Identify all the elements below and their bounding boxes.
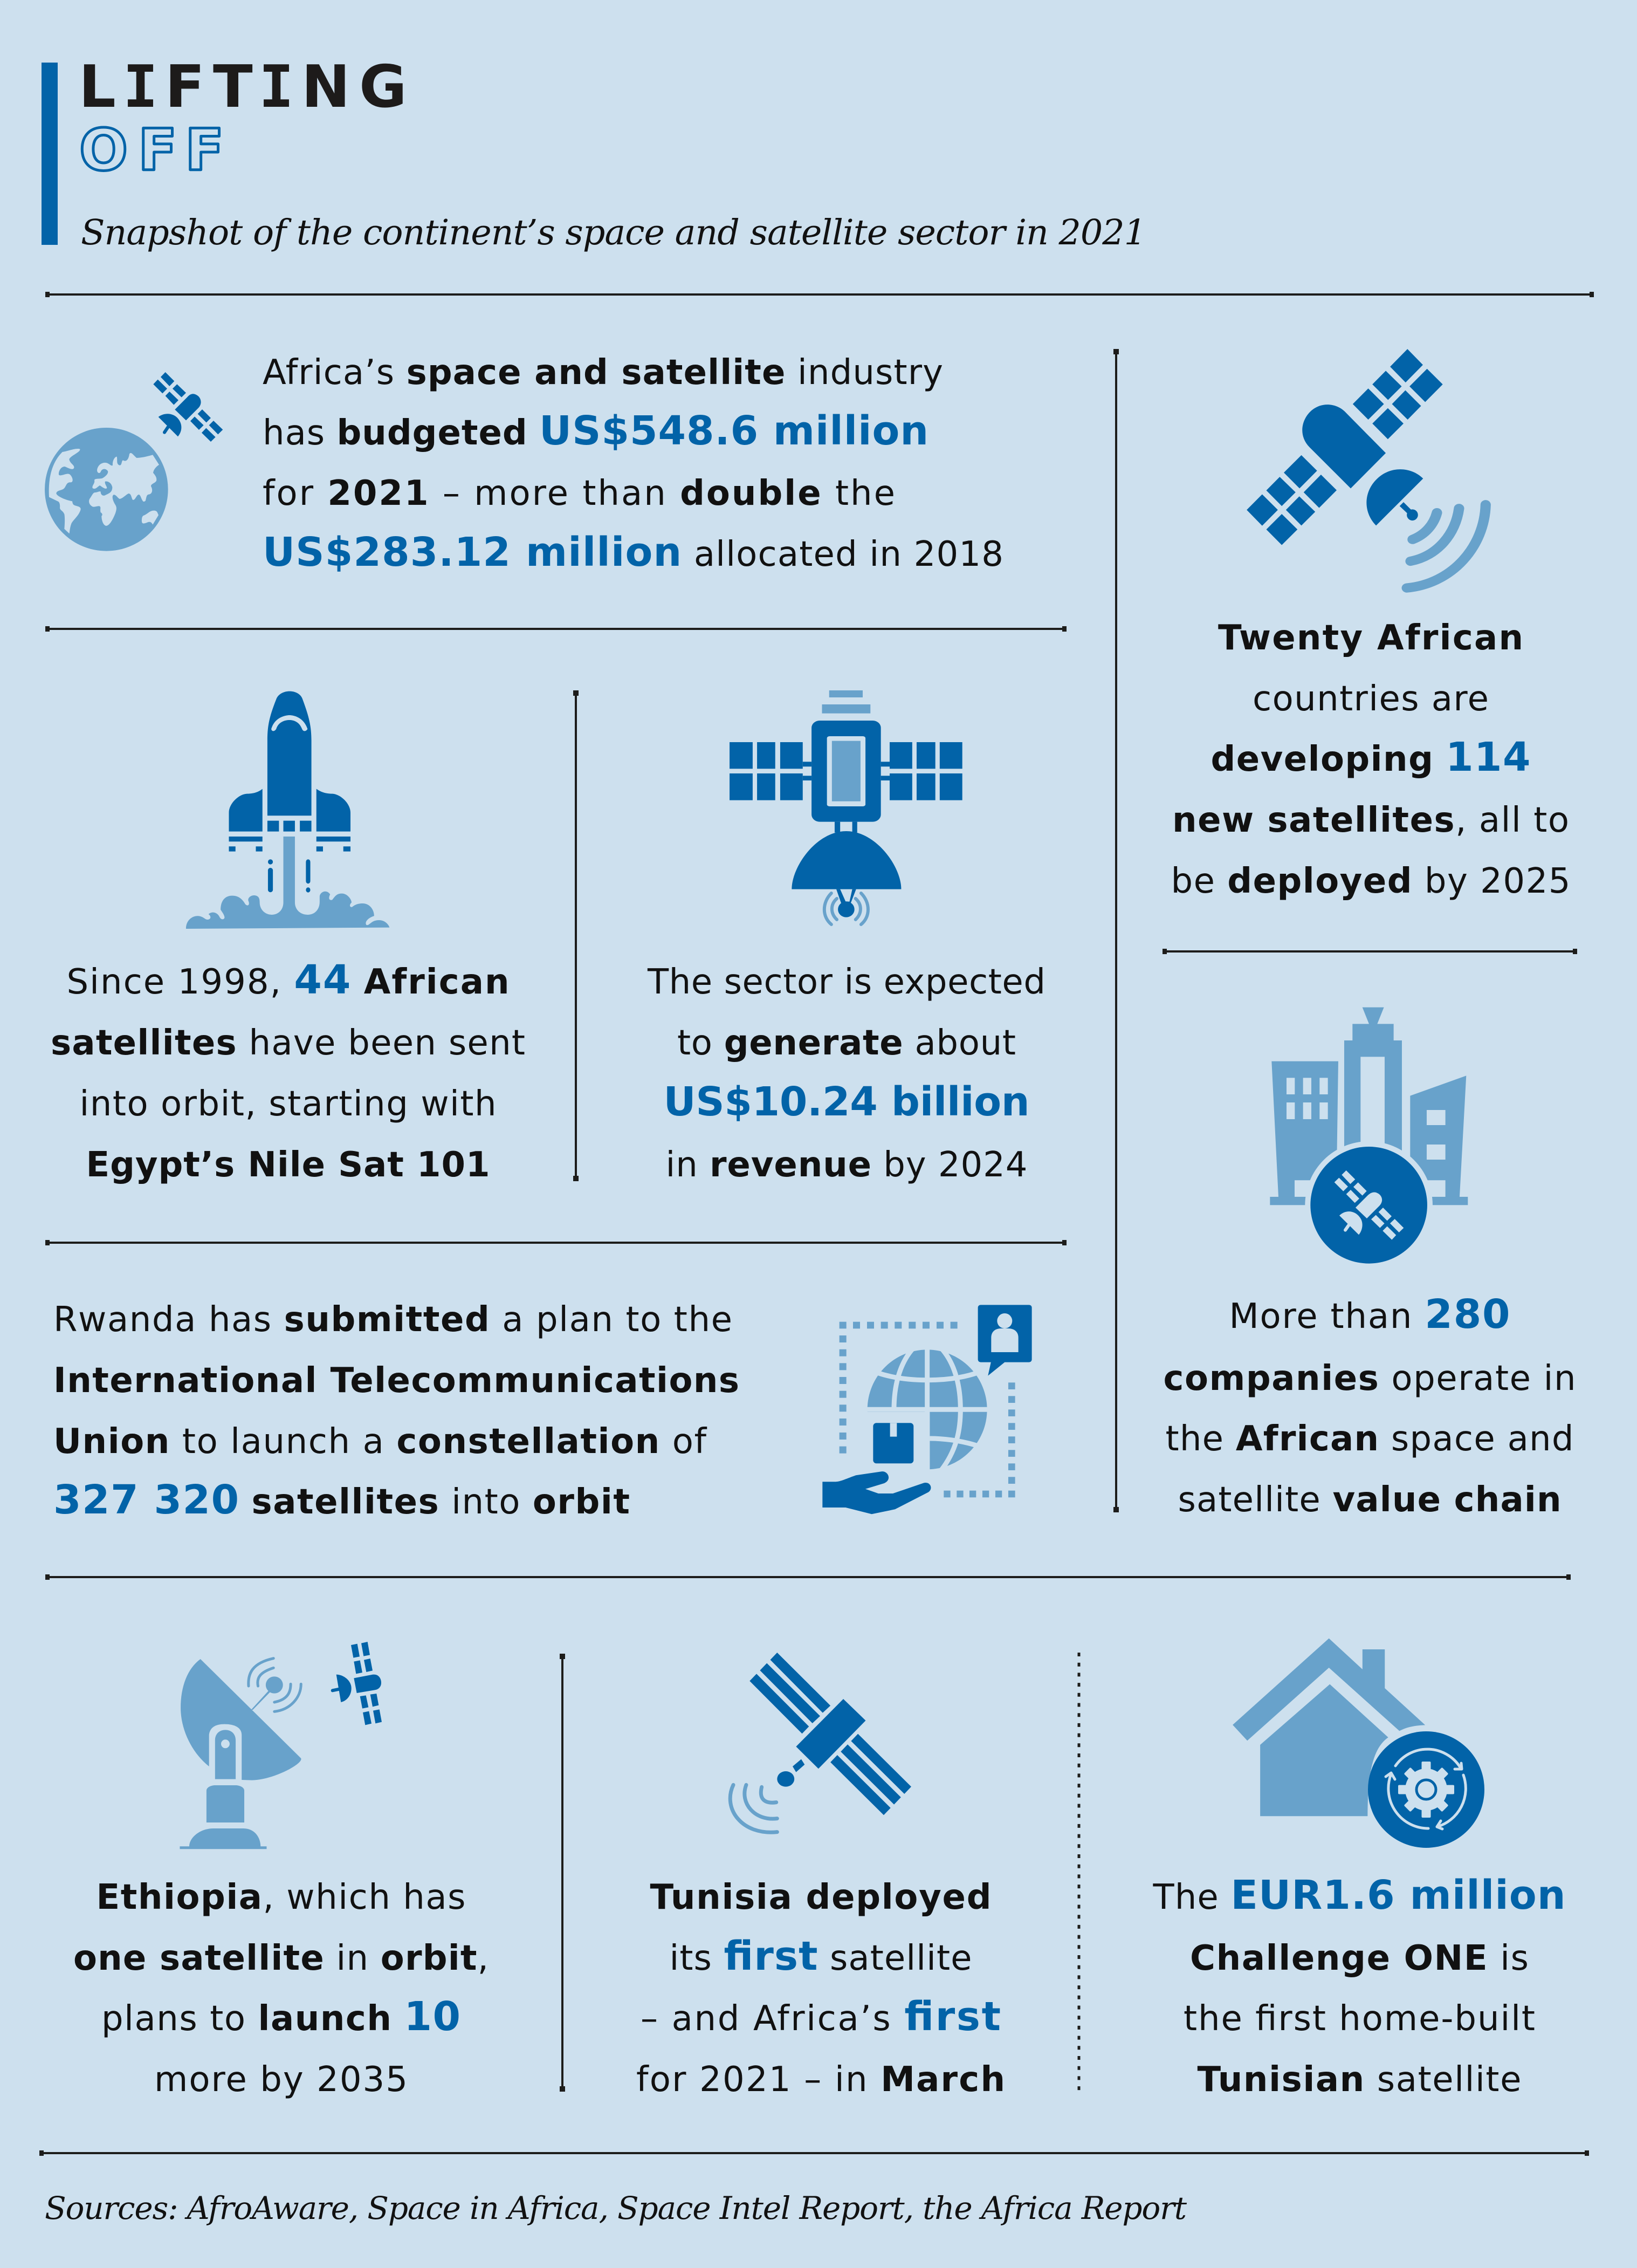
text: Rwanda: Rwanda has submitted a plan to the (53, 1300, 732, 1340)
text: Challenge ONE: Challenge ONE is (1190, 1938, 1529, 1978)
sources: Sources: AfroAware, Space in Africa, Space Intel Report, the Africa Report (45, 2190, 1187, 2226)
text: revenue (647, 962, 1046, 1185)
title block (42, 53, 1146, 253)
title: LIFTING: F (165, 53, 205, 121)
icon: house with gear badge (1233, 1639, 1484, 1848)
icon: rocket launch (186, 691, 389, 929)
panel: twenty countries (1171, 349, 1570, 901)
text: launched satellites: Egypt’s Nile Sat 101 (86, 1145, 490, 1185)
text: revenue: US$10.24 billion (663, 1079, 1030, 1125)
text: Rwanda: Union to launch a constellation of (53, 1422, 707, 1462)
panel: 280 companies (1164, 1008, 1576, 1520)
text: 280 companies: companies operate in (1164, 1359, 1576, 1399)
text: Tunisia (636, 1878, 1005, 2100)
panel: budget (45, 353, 1003, 575)
text: 280 companies (1164, 1291, 1576, 1520)
accent bar (42, 63, 58, 245)
title: OFF: O (79, 117, 128, 183)
text: Challenge ONE: Tunisian satellite (1197, 2060, 1522, 2100)
text: launched satellites: into orbit, starting with (80, 1084, 496, 1124)
text: Challenge ONE: The EUR1.6 million (1153, 1872, 1566, 1918)
text: launched satellites: Since 1998, 44 African (67, 957, 509, 1003)
subtitle: Snapshot of the continent’s space and satellite sector in 2021 (81, 213, 1146, 253)
icon: city with satellite badge (1270, 1008, 1468, 1269)
text: Challenge ONE: the first home-built (1184, 1999, 1535, 2039)
text: Tunisia: Tunisia deployed (650, 1878, 991, 1917)
text: twenty countries: new satellites, all to (1172, 800, 1569, 840)
icon: globe, parcel and hand (822, 1305, 1032, 1514)
text: Rwanda: International Telecommunications (53, 1361, 739, 1401)
icon: satellite in orbit (730, 1653, 911, 1832)
title: LIFTING: T (213, 53, 253, 121)
icon: globe with satellite (45, 372, 223, 551)
text: twenty countries (1171, 618, 1570, 901)
panel: Ethiopia (73, 1642, 489, 2100)
icon: ground dish and satellite (180, 1642, 382, 1849)
text: Ethiopia: Ethiopia, which has (96, 1878, 466, 1917)
text: twenty countries: Twenty African (1218, 618, 1523, 658)
text: 280 companies: More than 280 (1229, 1291, 1510, 1338)
text: 280 companies: satellite value chain (1178, 1480, 1562, 1520)
text: launched satellites: satellites have been sent (51, 1023, 525, 1063)
panel: Challenge ONE (1153, 1639, 1566, 2100)
title: LIFTING: L (79, 53, 116, 121)
text: Challenge ONE (1153, 1872, 1566, 2100)
text: budget (263, 353, 1003, 575)
text: Rwanda (53, 1300, 739, 1523)
text: revenue: to generate about (677, 1023, 1016, 1063)
icon: satellite with dish (730, 690, 962, 924)
text: twenty countries: developing 114 (1211, 734, 1530, 780)
text: Tunisia: for 2021 – in March (636, 2060, 1005, 2100)
panel: launched satellites (51, 691, 525, 1185)
text: 280 companies: the African space and (1166, 1419, 1573, 1459)
title: LIFTING: G (359, 53, 407, 121)
text: budget: US$283.12 million allocated in 2018 (263, 529, 1003, 575)
text: Ethiopia: one satellite in orbit, (73, 1938, 489, 1978)
text: Ethiopia: plans to launch 10 (101, 1993, 460, 2040)
title: OFF: F (138, 117, 177, 183)
title: LIFTING: I (123, 53, 158, 121)
panel: revenue (647, 690, 1046, 1185)
text: Tunisia: – and Africa’s first (641, 1993, 1001, 2040)
text: revenue: The sector is expected (647, 962, 1046, 1002)
panel: Tunisia (636, 1653, 1005, 2100)
text: Ethiopia (73, 1878, 489, 2100)
title: OFF: F (185, 117, 224, 183)
text: launched satellites (51, 957, 525, 1185)
panel: Rwanda (53, 1300, 1032, 1523)
text: budget: Africa’s space and satellite industry (263, 353, 943, 393)
text: Rwanda: 327 320 satellites into orbit (53, 1477, 630, 1523)
icon: satellite with signal (1247, 349, 1485, 588)
text: Tunisia: its first satellite (670, 1933, 972, 1979)
title: LIFTING: I (259, 53, 294, 121)
title: LIFTING: N (301, 53, 350, 121)
text: Ethiopia: more by 2035 (154, 2060, 408, 2100)
text: revenue: in revenue by 2024 (665, 1145, 1028, 1185)
text: budget: for 2021 – more than double the (263, 474, 895, 513)
text: twenty countries: be deployed by 2025 (1171, 861, 1570, 901)
text: budget: has budgeted US$548.6 million (263, 408, 928, 454)
text: twenty countries: countries are (1253, 679, 1489, 719)
